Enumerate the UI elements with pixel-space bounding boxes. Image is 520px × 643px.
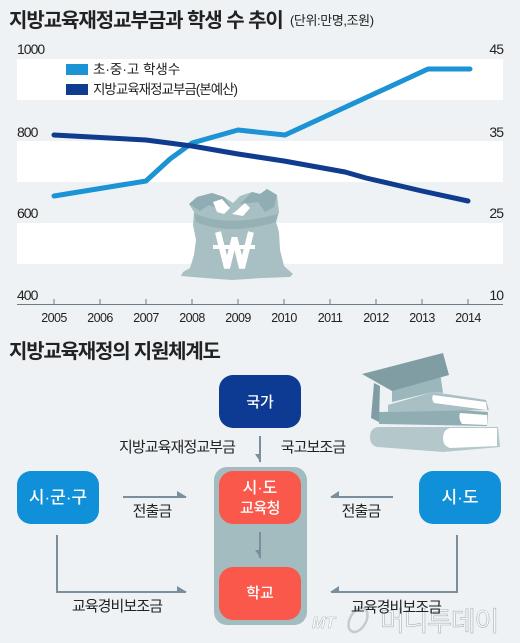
box: province: 시·도 — [442, 488, 478, 507]
legend: 지방교육재정교부금(본예산) — [93, 82, 238, 97]
box: city county district: 시·군·구 — [29, 488, 87, 507]
flow labels: 전출금 — [133, 503, 172, 520]
box: school — [219, 567, 301, 620]
flow labels: 국고보조금 — [281, 439, 346, 456]
right axis labels: 35 — [489, 124, 504, 140]
x axis: 2009 — [225, 311, 251, 325]
x axis: 2010 — [271, 311, 297, 325]
flow labels: 교육경비보조금 — [72, 598, 163, 615]
x axis — [17, 299, 503, 325]
flow labels: 교육경비보조금 — [351, 599, 442, 616]
icon: books and graduation cap — [362, 353, 500, 452]
arrow: state to education office — [255, 436, 261, 463]
legend: 초·중·고 학생수 — [93, 62, 180, 77]
right axis labels: 10 — [489, 287, 504, 303]
x axis: 2007 — [133, 311, 159, 325]
arrow: city transfer — [123, 491, 187, 497]
x axis: 2008 — [179, 311, 205, 325]
left axis labels — [17, 41, 45, 303]
box: province — [419, 471, 501, 524]
watermark: MT logo — [312, 605, 498, 637]
panel: education office and school group — [214, 467, 307, 625]
x axis: 2012 — [363, 311, 389, 325]
x axis: 2014 — [455, 311, 481, 325]
x axis: 2011 — [318, 311, 343, 325]
line: school students — [54, 69, 470, 196]
icon: money bag with won sign — [181, 189, 293, 280]
box: city county district — [17, 471, 99, 524]
line: education grant — [54, 135, 468, 201]
left axis labels: 600 — [17, 205, 39, 221]
box: school: 학교 — [246, 585, 274, 602]
left axis labels: 800 — [17, 124, 39, 140]
flow labels: 전출금 — [342, 503, 381, 520]
x axis: 2006 — [87, 311, 113, 325]
right axis labels: 25 — [489, 205, 504, 221]
watermark: MT logo: MT — [312, 615, 336, 632]
flow labels — [72, 439, 442, 616]
flow labels: 지방교육재정교부금 — [119, 439, 236, 456]
arrow: city subsidy — [57, 535, 187, 592]
arrow: education office to school — [255, 532, 261, 559]
box: education office: 교육청 — [240, 500, 280, 517]
x axis: 2005 — [41, 311, 67, 325]
left axis labels: 1000 — [17, 41, 45, 57]
box: education office — [219, 471, 301, 524]
line chart: students and grant trends — [17, 41, 504, 325]
box: state — [219, 375, 301, 428]
watermark: MT logo: 머니투데이 — [380, 607, 498, 637]
title: chart heading: 지방교육재정교부금과 학생 수 추이 — [9, 9, 283, 32]
x axis: 2013 — [409, 311, 435, 325]
arrow: province transfer — [330, 491, 393, 497]
left axis labels: 400 — [17, 287, 39, 303]
heading: support system: 지방교육재정의 지원체계도 — [9, 340, 221, 363]
legend — [66, 62, 238, 97]
box: education office: 시·도 — [243, 480, 277, 497]
box: state: 국가 — [246, 394, 274, 411]
arrow: province subsidy — [330, 535, 457, 592]
right axis labels: 45 — [489, 41, 504, 57]
right axis labels — [489, 41, 504, 303]
title: chart heading: (단위:만명,조원) — [290, 13, 374, 28]
